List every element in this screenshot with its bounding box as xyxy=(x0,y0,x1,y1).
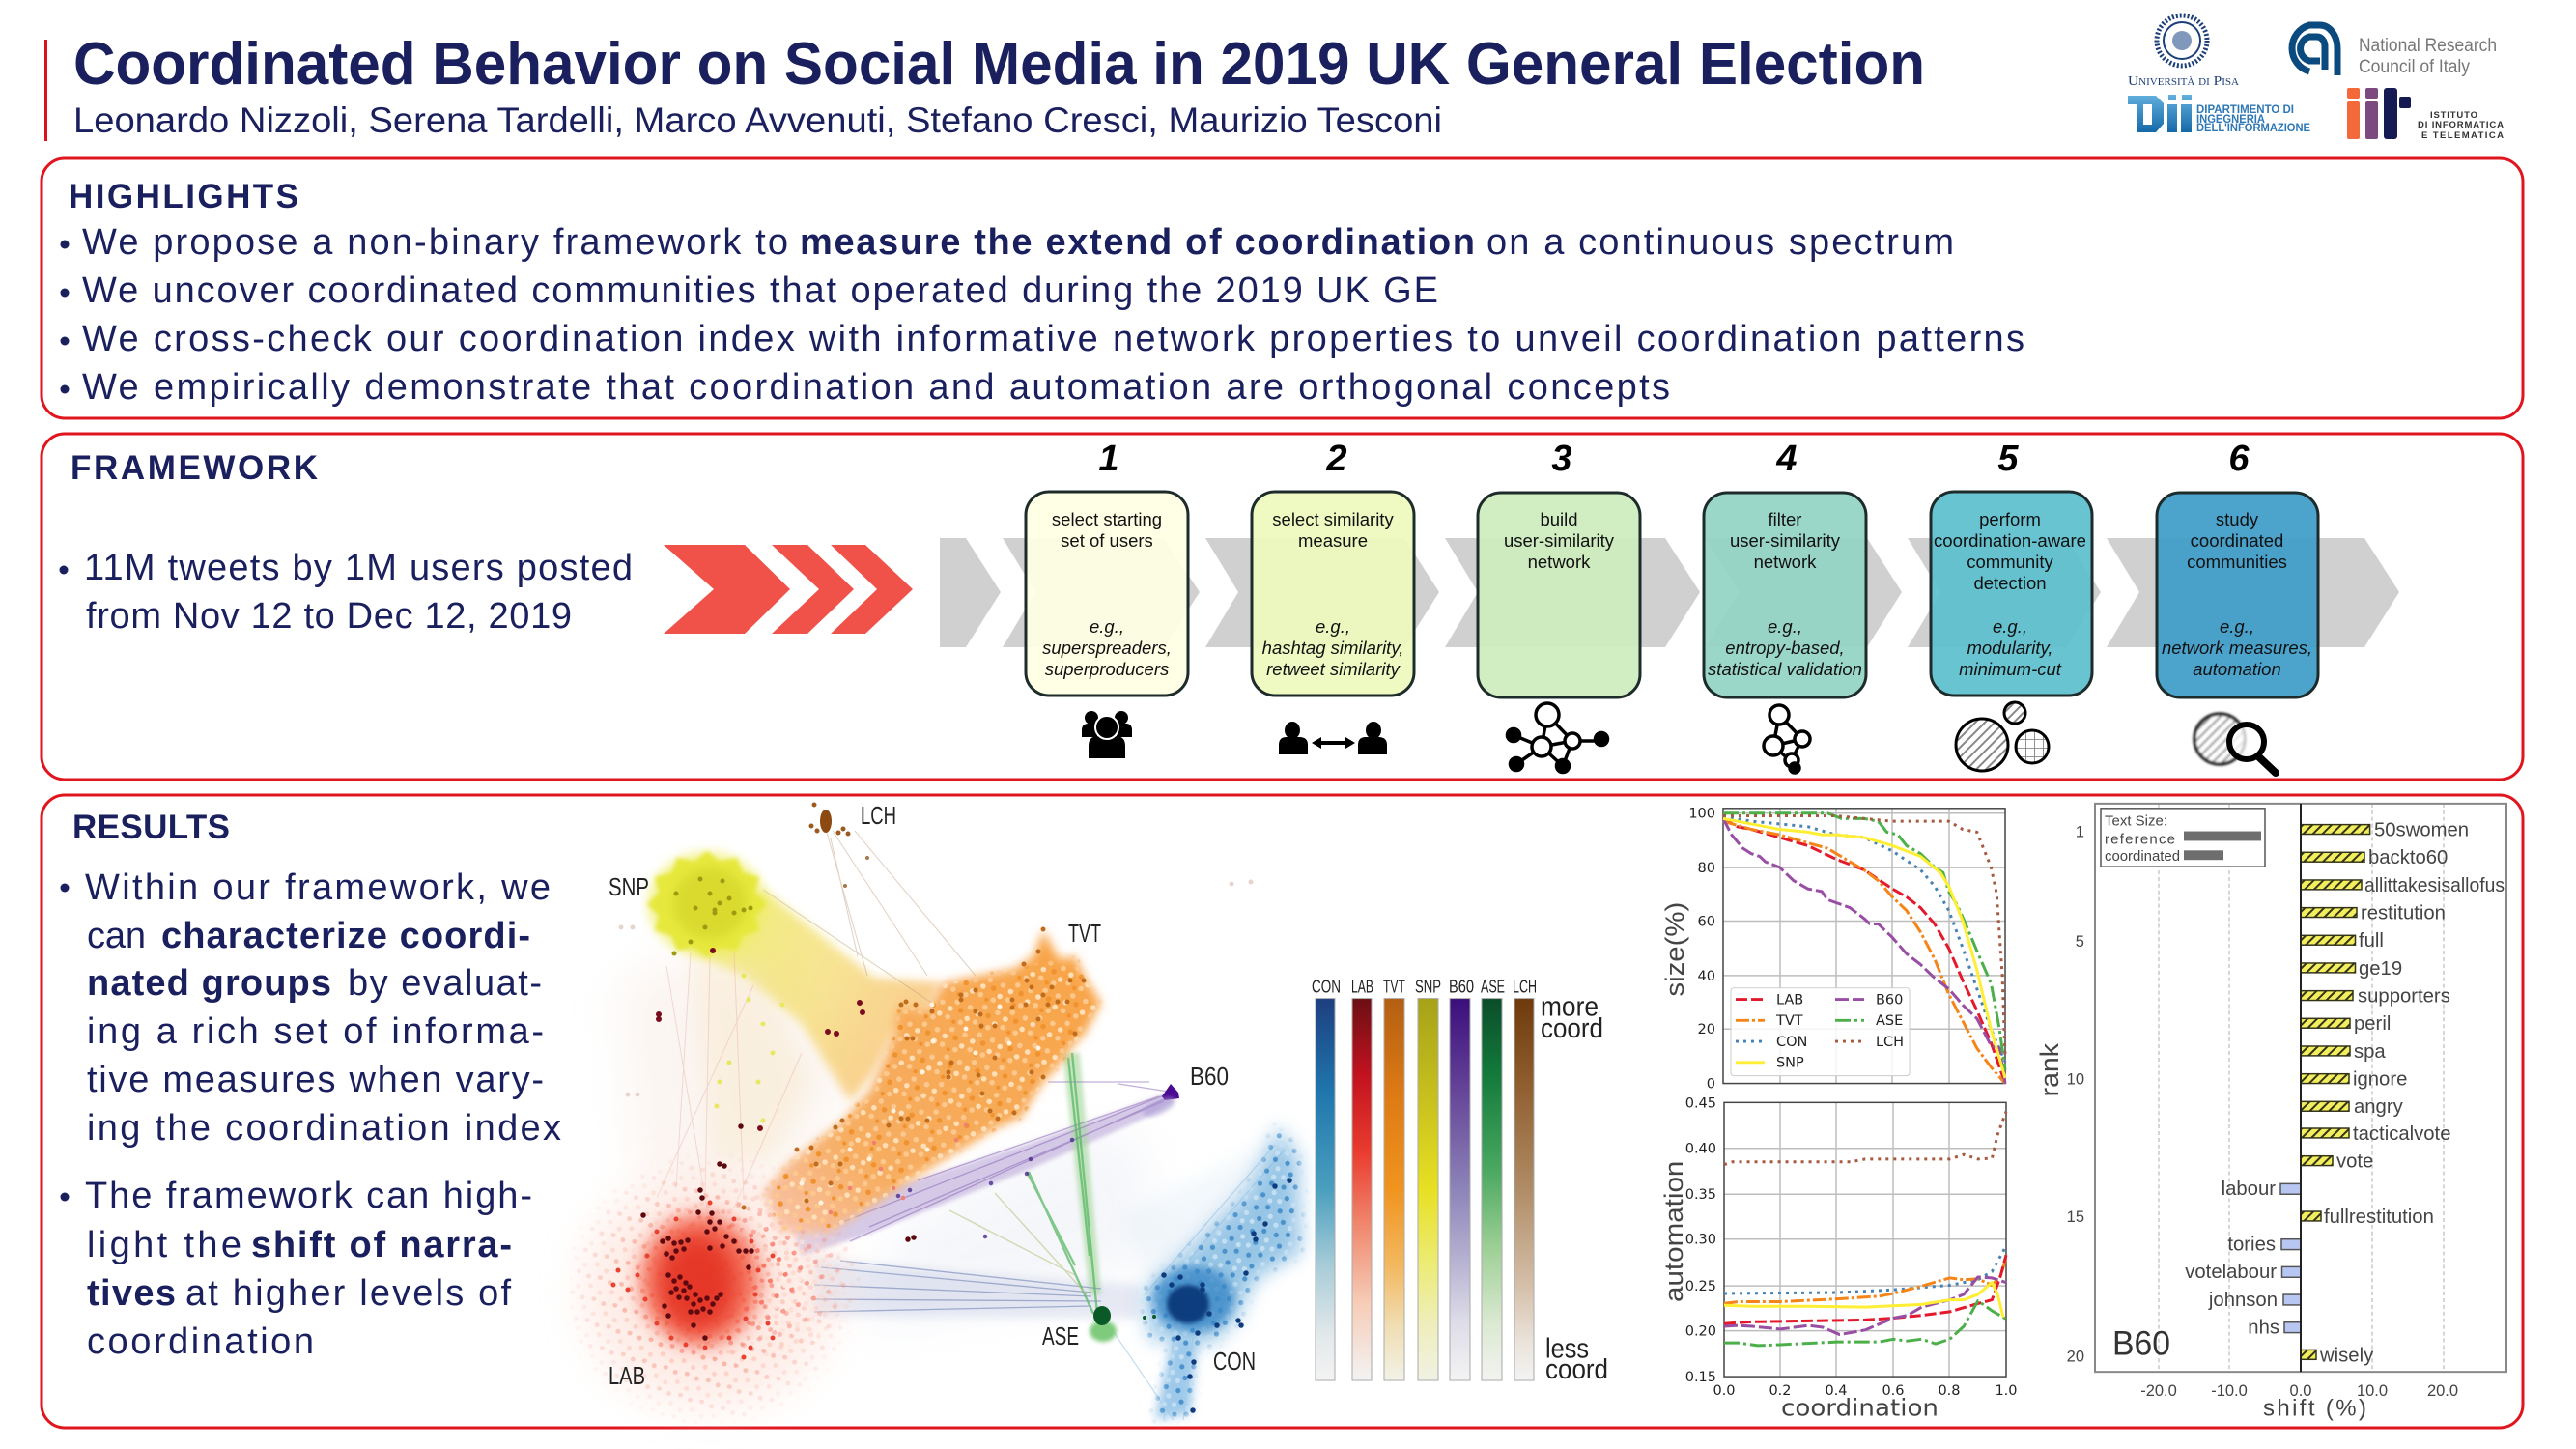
rank ticks: 10 xyxy=(2067,1071,2084,1089)
step 3: 3 xyxy=(1551,439,1572,479)
highlight bullet 1: measure the extend of coordination xyxy=(800,222,1475,263)
step 5: e.g., xyxy=(1993,616,2027,637)
x axis ticks: 0.4 xyxy=(1825,1383,1848,1399)
step 1: select starting xyxy=(1052,509,1162,529)
step 5: modularity, xyxy=(1967,638,2053,658)
y axis ticks: 0.40 xyxy=(1685,1142,1716,1157)
y axis ticks xyxy=(1688,807,1715,1092)
results bullet 2: at higher levels of xyxy=(185,1273,511,1314)
logo: DII: DIPARTIMENTO DI xyxy=(2196,102,2294,116)
y axis title: size(%) xyxy=(1660,902,1689,997)
logo: Università di Pisa xyxy=(2128,15,2240,89)
network labels: CON xyxy=(1213,1347,1256,1376)
step 5: minimum-cut xyxy=(1959,659,2062,679)
step 5: 5 xyxy=(1997,439,2019,479)
y axis ticks: 0 xyxy=(1707,1077,1715,1092)
colour bar labels: TVT xyxy=(1383,978,1405,998)
y axis ticks: 0.35 xyxy=(1685,1187,1716,1203)
term labels: wisely xyxy=(2319,1345,2374,1366)
y axis title: rank xyxy=(2035,1042,2064,1096)
term labels: peril xyxy=(2354,1013,2391,1035)
colour bar labels: LAB xyxy=(1351,978,1373,998)
term labels: full xyxy=(2359,930,2384,952)
logo: CNR xyxy=(2292,25,2497,77)
highlight bullet 2: We uncover coordinated communities that operated during the 2019 UK GE xyxy=(82,270,1438,311)
y axis ticks xyxy=(1685,1095,1716,1385)
x axis ticks: 0.6 xyxy=(1882,1383,1905,1399)
x axis ticks: 0.2 xyxy=(1769,1383,1792,1399)
line legend: ASE xyxy=(1876,1013,1903,1029)
logo: CNR: Council of Italy xyxy=(2359,57,2470,77)
icon: user similarity xyxy=(1279,722,1387,754)
cluster: LAB xyxy=(570,1123,917,1430)
term labels: johnson xyxy=(2208,1290,2278,1311)
x axis title: coordination xyxy=(1781,1395,1939,1422)
legend: text size xyxy=(2101,809,2265,867)
chart: automation vs coordination xyxy=(1659,1095,2018,1422)
step 6: coordinated xyxy=(2191,530,2283,551)
heading: framework: FRAMEWORK xyxy=(71,449,318,487)
logo: IIT xyxy=(2347,88,2504,141)
logo: DII: INGEGNERIA xyxy=(2196,112,2265,126)
term labels: nhs xyxy=(2248,1318,2279,1339)
edges xyxy=(618,829,1299,1420)
logo: Università di Pisa: Università di Pisa xyxy=(2128,74,2240,89)
term labels: restitution xyxy=(2361,903,2446,923)
term labels: backto60 xyxy=(2368,847,2448,868)
x axis ticks: 20.0 xyxy=(2427,1382,2458,1400)
colour bar labels xyxy=(1312,978,1537,998)
term labels: fullrestitution xyxy=(2324,1207,2434,1228)
step 6: e.g., xyxy=(2220,616,2254,637)
term labels: votelabour xyxy=(2185,1262,2277,1283)
x axis ticks: -10.0 xyxy=(2211,1382,2248,1400)
y axis ticks: 60 xyxy=(1698,914,1715,929)
step 1: e.g., xyxy=(1090,616,1124,637)
results bullet 1: Within our framework, we xyxy=(85,867,551,908)
line legend: LAB xyxy=(1776,993,1803,1008)
x axis ticks: 0.0 xyxy=(1713,1383,1736,1399)
cluster: ASE xyxy=(1090,1306,1154,1342)
cluster: TVT xyxy=(742,927,1107,1238)
colour bar labels: CON xyxy=(1312,978,1341,998)
arrow: gray process chevrons xyxy=(940,538,2399,647)
logo: DII xyxy=(2128,95,2310,134)
step 1: 1 xyxy=(1098,439,1119,479)
legend: text size: reference xyxy=(2105,832,2175,847)
step 3: build xyxy=(1540,509,1578,529)
step 2: measure xyxy=(1298,530,1368,551)
results bullet 1: ing a rich set of informa- xyxy=(87,1011,544,1052)
step 4 xyxy=(1704,439,1866,697)
step 4: entropy-based, xyxy=(1725,638,1845,658)
term labels: vote xyxy=(2336,1151,2373,1173)
step 5 xyxy=(1931,439,2092,696)
step 1: set of users xyxy=(1061,530,1153,551)
dataset description: from Nov 12 to Dec 12, 2019 xyxy=(86,596,572,637)
logo: IIT: E TELEMATICA xyxy=(2421,130,2504,141)
step 5: perform xyxy=(1979,509,2041,529)
step 3: user-similarity xyxy=(1504,530,1615,551)
y axis title: automation xyxy=(1659,1161,1688,1302)
colour bar labels: ASE xyxy=(1481,978,1505,998)
icon: group of users xyxy=(1082,711,1132,758)
results bullet 1: tive measures when vary- xyxy=(87,1060,544,1100)
chart: size vs coordination xyxy=(1660,807,2005,1092)
y axis ticks: 0.25 xyxy=(1685,1279,1716,1294)
icon: study communities xyxy=(2194,714,2276,773)
rank ticks xyxy=(2067,824,2084,1365)
highlight bullet 4: We empirically demonstrate that coordination and automation are orthogonal concepts xyxy=(82,367,1670,408)
line legend: B60 xyxy=(1876,993,1903,1008)
line legend: CON xyxy=(1776,1035,1807,1050)
term labels: ge19 xyxy=(2359,958,2402,980)
logo: IIT: DI INFORMATICA xyxy=(2418,120,2504,130)
term labels xyxy=(2185,820,2505,1366)
y axis ticks: 0.20 xyxy=(1685,1324,1716,1340)
step 4: 4 xyxy=(1775,439,1798,479)
step 1: superspreaders, xyxy=(1042,638,1172,658)
step 6: 6 xyxy=(2228,439,2250,479)
term labels: tories xyxy=(2227,1235,2276,1256)
step 5: coordination-aware xyxy=(1934,530,2086,551)
chart: narrative shift B60 xyxy=(2035,804,2506,1422)
term labels: labour xyxy=(2222,1179,2276,1200)
highlight bullet 1: on a continuous spectrum xyxy=(1486,222,1954,263)
step 2: retweet similarity xyxy=(1266,659,1401,679)
term labels: supporters xyxy=(2358,986,2450,1007)
cluster: SNP xyxy=(621,851,1251,1128)
y axis ticks: 20 xyxy=(1698,1022,1715,1037)
step 4: user-similarity xyxy=(1730,530,1841,551)
cluster: B60 xyxy=(1141,1084,1179,1121)
icon: communities xyxy=(1956,702,2049,771)
step 5: community xyxy=(1967,552,2053,572)
line legend: SNP xyxy=(1776,1056,1804,1071)
scale end labels: more xyxy=(1541,992,1599,1022)
panel: highlights xyxy=(42,158,2523,418)
term labels: 50swomen xyxy=(2374,820,2469,840)
scale end labels xyxy=(1541,992,1608,1385)
results bullet 1 xyxy=(60,867,561,1149)
highlight bullet 1: We propose a non-binary framework to xyxy=(82,222,788,263)
heading: highlights: HIGHLIGHTS xyxy=(69,178,298,215)
network labels xyxy=(609,801,1256,1390)
x axis ticks: 0.0 xyxy=(2290,1382,2311,1400)
colour bars xyxy=(1316,999,1534,1380)
charts and legends xyxy=(1312,804,2506,1422)
y axis ticks: 80 xyxy=(1698,861,1715,876)
x axis ticks: 1.0 xyxy=(1995,1383,2018,1399)
step 2: select similarity xyxy=(1272,509,1394,529)
negative shift bars xyxy=(2280,1183,2301,1333)
term labels: angry xyxy=(2354,1096,2404,1118)
results bullet 2: coordination xyxy=(87,1321,314,1362)
step 2 xyxy=(1252,439,1414,696)
step 2: hashtag similarity, xyxy=(1262,638,1403,658)
highlight bullet 3: We cross-check our coordination index with informative network properties to unveil coordination patterns xyxy=(82,319,2024,359)
legend: text size: Text Size: xyxy=(2105,814,2167,830)
cluster: LCH xyxy=(811,805,867,886)
results bullet 1: nated groups xyxy=(87,963,331,1004)
scale end labels: coord xyxy=(1545,1354,1608,1385)
results bullet 2: light the xyxy=(87,1225,241,1265)
step 6: automation xyxy=(2193,659,2281,679)
dataset description: 11M tweets by 1M users posted xyxy=(84,548,633,588)
results bullet 1: characterize coordi- xyxy=(161,916,530,956)
scale end labels: less xyxy=(1545,1333,1589,1364)
step 3 xyxy=(1478,439,1640,697)
line legend: TVT xyxy=(1775,1013,1803,1029)
term labels: tacticalvote xyxy=(2353,1123,2450,1145)
logos xyxy=(2128,15,2504,141)
group label: B60 xyxy=(2112,1324,2170,1362)
rank ticks: 5 xyxy=(2076,933,2084,951)
logo: IIT: ISTITUTO xyxy=(2430,110,2477,121)
x axis ticks xyxy=(2140,1382,2458,1400)
arrow: red chevrons xyxy=(664,545,913,634)
step 2: 2 xyxy=(1325,439,1347,479)
panel: framework xyxy=(42,434,2523,780)
rank ticks: 20 xyxy=(2067,1348,2084,1365)
x axis ticks xyxy=(1713,1383,2018,1399)
highlight bullet 1 xyxy=(60,222,1954,263)
cluster: CON xyxy=(1134,1121,1312,1428)
step 1: superproducers xyxy=(1045,659,1169,679)
step 1 xyxy=(1026,439,1188,696)
network labels: TVT xyxy=(1068,919,1101,948)
term labels: spa xyxy=(2354,1041,2386,1063)
y axis ticks: 0.30 xyxy=(1685,1233,1716,1248)
step 4: statistical validation xyxy=(1708,659,1862,679)
colour bar labels: B60 xyxy=(1449,978,1474,998)
title: Coordinated Behavior on Social Media in 2019 UK General Election xyxy=(73,31,1925,98)
step 6 xyxy=(2157,439,2318,697)
network labels: SNP xyxy=(609,872,649,901)
panel: results xyxy=(42,795,2523,1439)
colour bar labels: LCH xyxy=(1513,978,1537,998)
term labels: ignore xyxy=(2353,1069,2407,1091)
step 5: detection xyxy=(1973,573,2047,593)
results bullet 2: shift of narra- xyxy=(251,1225,512,1265)
positive shift bars xyxy=(2301,825,2370,1359)
results bullet 1: ing the coordination index xyxy=(87,1108,561,1149)
logo: DII: DELL'INFORMAZIONE xyxy=(2196,121,2310,134)
accent bar xyxy=(44,40,47,141)
step 3: network xyxy=(1528,552,1591,572)
results bullet 2 xyxy=(60,1176,532,1362)
y axis ticks: 40 xyxy=(1698,969,1715,984)
logo: CNR: National Research xyxy=(2359,36,2497,56)
network labels: LAB xyxy=(609,1361,645,1390)
network labels: B60 xyxy=(1190,1062,1229,1091)
x axis ticks: -20.0 xyxy=(2140,1382,2177,1400)
results bullet 2: The framework can high- xyxy=(85,1176,532,1216)
x axis ticks: 0.8 xyxy=(1938,1383,1961,1399)
results bullet 1: can xyxy=(87,916,146,956)
x axis title: shift (%) xyxy=(2263,1396,2366,1422)
step 6: network measures, xyxy=(2162,638,2312,658)
legend: text size: coordinated xyxy=(2105,849,2180,865)
step 4: e.g., xyxy=(1768,616,1802,637)
rank ticks: 1 xyxy=(2076,824,2084,840)
dataset description xyxy=(60,548,633,637)
step 6: communities xyxy=(2187,552,2287,572)
y axis ticks: 0.15 xyxy=(1685,1370,1716,1385)
results bullet 2: tives xyxy=(87,1273,176,1314)
line legend: LCH xyxy=(1876,1035,1904,1050)
chart: coordination network xyxy=(570,801,1323,1439)
x axis ticks: 10.0 xyxy=(2357,1382,2388,1400)
step 6: study xyxy=(2216,509,2259,529)
line legend xyxy=(1731,988,1910,1076)
authors: Leonardo Nizzoli, Serena Tardelli, Marco Avvenuti, Stefano Cresci, Maurizio Tesconi xyxy=(73,100,1442,140)
results bullet 1: by evaluat- xyxy=(348,963,542,1004)
y axis ticks: 0.45 xyxy=(1685,1095,1716,1111)
step 4: filter xyxy=(1769,509,1801,529)
network labels: ASE xyxy=(1042,1321,1079,1350)
y axis ticks: 100 xyxy=(1688,807,1715,822)
network labels: LCH xyxy=(861,801,896,830)
heading: results: RESULTS xyxy=(72,809,230,846)
step 2: e.g., xyxy=(1316,616,1350,637)
legend: coordination colour scales xyxy=(1312,978,1608,1385)
icon: network xyxy=(1507,703,1607,773)
rank ticks: 15 xyxy=(2067,1208,2084,1226)
step 4: network xyxy=(1754,552,1817,572)
term labels: allittakesisallofus xyxy=(2364,875,2505,896)
colour bar labels: SNP xyxy=(1415,978,1441,998)
icon: filtered network xyxy=(1764,705,1810,773)
scale end labels: coord xyxy=(1541,1013,1603,1044)
